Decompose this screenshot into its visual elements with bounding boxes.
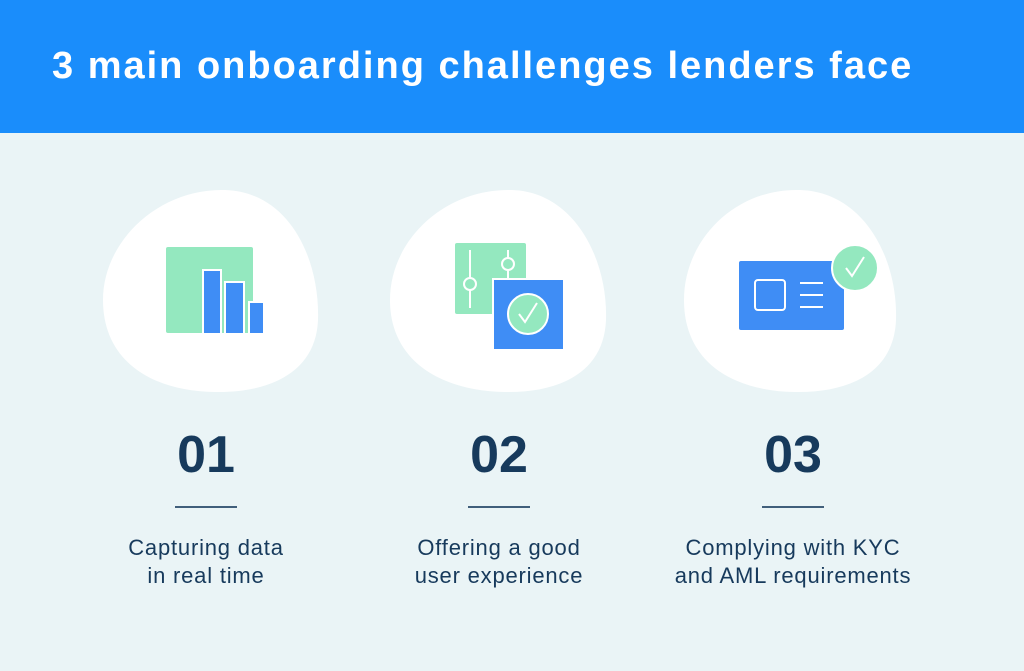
text 2: Offering a good [417,534,581,560]
text 3: Complying with KYC [686,534,900,560]
text 1 [128,534,284,588]
text 3 [675,534,911,588]
number 01: 01 [177,426,235,484]
blob 1 [103,190,318,392]
text 2: user experience [415,562,583,588]
column 1 [128,426,284,588]
title: 3 main onboarding challenges lenders face [52,45,913,87]
header banner [0,0,1024,133]
icon: ID card with check [739,245,878,330]
text 1: in real time [147,562,265,588]
text 2 [415,534,583,588]
blob 2 [390,190,606,392]
icon: bar chart [166,247,264,334]
icon: sliders with check [455,243,564,350]
text 1: Capturing data [128,534,284,560]
number 02: 02 [470,426,528,484]
text 3: and AML requirements [675,562,911,588]
number 03: 03 [764,426,822,484]
blob 3 [684,190,896,392]
column 2 [415,426,583,588]
column 3 [675,426,911,588]
